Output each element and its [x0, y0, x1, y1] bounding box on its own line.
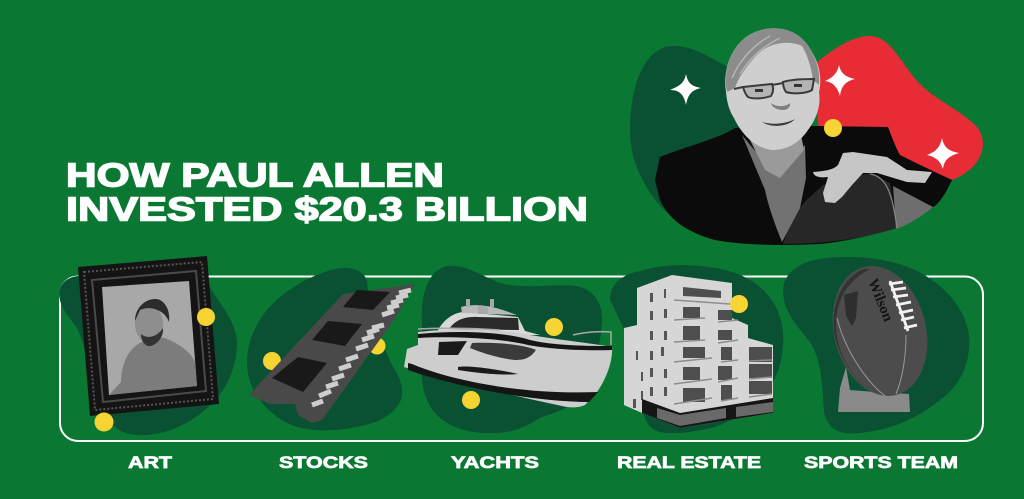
chair side panel [893, 186, 933, 229]
glasses [734, 79, 814, 98]
chip [272, 357, 327, 392]
yellow dot [263, 352, 281, 370]
neck [745, 130, 804, 178]
nose shade [771, 103, 790, 110]
yellow dot [824, 119, 842, 137]
label: SPORTS TEAM [804, 454, 958, 472]
blob [610, 265, 783, 433]
NFL mark [844, 291, 858, 326]
item: yachts [404, 266, 612, 472]
ball seam [837, 318, 906, 396]
title [66, 156, 588, 228]
memory board [249, 284, 415, 423]
ground floor [642, 398, 773, 428]
balcony rails [674, 300, 772, 404]
label: REAL ESTATE [617, 454, 761, 472]
blob [247, 268, 402, 430]
building body [624, 275, 773, 428]
recessed balconies [683, 287, 772, 402]
item: art [59, 256, 237, 472]
gold contacts [312, 290, 411, 405]
hull [404, 330, 612, 407]
title: HOW PAUL ALLEN [66, 156, 444, 194]
title: INVESTED $20.3 BILLION [66, 190, 588, 228]
hair [135, 299, 169, 322]
portrait of Paul Allen [630, 28, 983, 245]
sparkle left [670, 74, 701, 105]
ball shading [834, 269, 878, 393]
football [819, 256, 941, 406]
red blob [812, 36, 983, 180]
mouth [762, 119, 795, 126]
railing [418, 328, 611, 345]
blob [783, 257, 969, 433]
hair streaks [732, 36, 780, 78]
hand [813, 152, 932, 203]
shirt [742, 135, 806, 242]
sparkle right [927, 138, 959, 169]
yellow dot [94, 412, 114, 432]
yellow dot [545, 318, 563, 336]
laces [889, 281, 917, 331]
outline frame [60, 276, 983, 441]
blob [422, 266, 602, 433]
chip [343, 290, 390, 310]
yellow dot [730, 295, 748, 313]
yellow dot [368, 338, 386, 354]
face [135, 305, 163, 343]
black stripes [418, 332, 612, 350]
item: real estate [610, 265, 783, 472]
yacht superstructure [438, 312, 540, 335]
side windows [633, 289, 667, 408]
label: YACHTS [451, 454, 539, 472]
label: ART [128, 454, 172, 472]
sparkle middle [825, 65, 855, 96]
item: sports team [783, 256, 969, 472]
chip [312, 321, 362, 346]
yellow dot [197, 308, 215, 326]
windows [438, 341, 467, 355]
head [725, 28, 820, 150]
yellow dot [462, 391, 480, 409]
dark blob [630, 46, 760, 225]
beard [141, 328, 163, 346]
hair [726, 28, 819, 92]
ball lettering: Wilson [864, 277, 896, 325]
item: stocks [247, 268, 415, 472]
portrait bust [109, 337, 197, 395]
eyes [755, 84, 802, 92]
chair [783, 173, 897, 244]
tee [838, 367, 910, 412]
radar mast [466, 299, 494, 314]
jacket [655, 126, 952, 245]
painting [102, 281, 197, 395]
label: STOCKS [279, 454, 368, 472]
blob [59, 270, 237, 435]
picture frame [78, 256, 219, 416]
